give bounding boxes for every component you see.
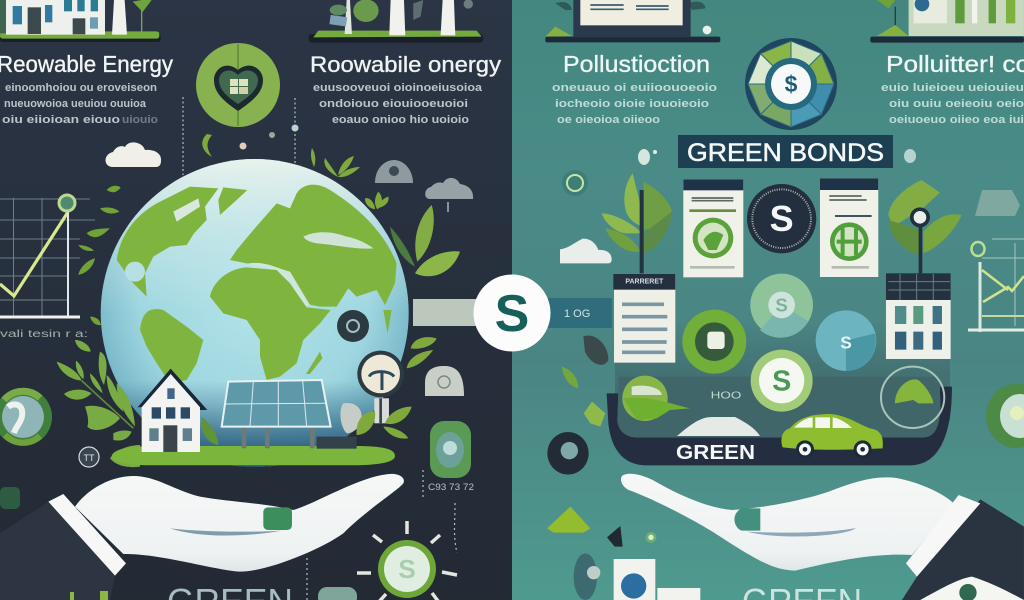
report document (613, 274, 675, 363)
icon: grey clouds, right of globe (375, 160, 473, 212)
dark dollar seal: S (770, 198, 794, 239)
icon: glowing green coin (357, 521, 457, 600)
icon: dollar pie wheel (745, 38, 837, 130)
text block: renewable energy description, left (2, 82, 158, 126)
text block: pollution description (552, 82, 717, 126)
dotted connector lines and small icons above globe (183, 97, 298, 175)
coin: blue: S (840, 332, 852, 352)
illustration: leaves right of globe (365, 192, 460, 368)
white car (677, 417, 760, 436)
left tree (602, 173, 672, 273)
right tree (888, 180, 962, 273)
dark dollar seal (747, 184, 816, 253)
solar panel (222, 380, 331, 448)
accents around banner (562, 149, 916, 196)
icon: small outlined seal, left: TT (84, 453, 95, 463)
text block: renewable energy description, left: uiouio (122, 114, 158, 126)
capsule caption: C93 73 72 (428, 482, 474, 492)
panel: renewable energy background (0, 0, 513, 600)
dark leaf, left (583, 335, 608, 365)
illustration: vehicles and GREEN label in tray (676, 414, 883, 464)
text block: renewable energy description, centre: ondoiouo eiouiooeuoioi (319, 98, 468, 110)
illustration: left hand and sleeve (0, 474, 404, 600)
text block: renewable energy description, left: oiu eiioioan eiouo (2, 114, 120, 126)
connector bar: right of central badge: 1 OG (564, 308, 590, 320)
tray label: GREEN (676, 442, 755, 464)
continents (117, 185, 397, 383)
text block: pollution description, far right: euio luieioeu ueiouieu (881, 82, 1024, 94)
icon: central dollar badge: S (495, 285, 529, 343)
illustration: green bond icon grid (560, 173, 962, 412)
chart label: vali tesin r a: (0, 329, 88, 340)
illustration: leafy bush, lower left of globe (57, 340, 140, 467)
chart: line chart, right edge (968, 190, 1024, 332)
coin: dollar (751, 350, 813, 412)
connector bar: left of central badge (413, 299, 483, 326)
coin: green ring (682, 310, 746, 374)
icon: green ring with question mark, left (0, 388, 52, 446)
faint pavilion icon (975, 190, 1020, 216)
illustration: small leaves, left of globe (78, 186, 121, 325)
illustration: tray holding green bonds (607, 320, 952, 465)
text block: pollution description: iocheoio oioie iouoieoio (555, 98, 709, 110)
text block: pollution description, far right: oeiuoeuo oiieo eoa iui (889, 114, 1024, 126)
text block: renewable energy description, left: nueuowoioa ueuiou ouuioa (4, 98, 147, 110)
cloud (560, 239, 612, 263)
building (886, 273, 951, 359)
icon: green capsule, lower right (428, 421, 474, 492)
illustration: tree and towers on lawn, top centre-left (309, 0, 483, 43)
icon: small pill, bottom left panel (318, 587, 357, 600)
icon: leaves above right of globe (311, 148, 360, 177)
icon: green cabbage orb (622, 376, 742, 421)
coin: teal-green (750, 274, 813, 338)
illustration: building panel, top right (870, 0, 1024, 43)
icon: small outlined seal, left (79, 447, 99, 467)
coin: teal-green: S (775, 295, 788, 316)
heading: pollution, far right: Polluitter! co (886, 51, 1024, 77)
text block: renewable energy description, left: einoomhoiou ou eroveiseon (5, 82, 157, 94)
illustration: right hand and sleeve (621, 474, 1024, 600)
icon: green capsule coin, right edge (986, 384, 1024, 448)
text block: pollution description, far right: oiu ouiu oeieoiu oeio (889, 98, 1024, 110)
icon: white cloud, left (106, 142, 161, 167)
icon: lime bar, bottom edge left (70, 591, 108, 600)
icon: dark round seal, left of tray (547, 432, 589, 475)
bond certificate, right (820, 178, 878, 277)
illustration: lawn with house and solar panel (112, 369, 395, 465)
text block: pollution description, far right (881, 82, 1024, 126)
icon: dark badge on globe (337, 310, 369, 342)
icon: small green box, bottom left (0, 487, 20, 509)
connector bar: right of central badge (546, 298, 612, 328)
heading: pollution reduction, right panel: Pollustioction (563, 51, 710, 77)
bushes beside house (201, 417, 218, 445)
icon: central dollar badge (474, 274, 550, 352)
heading: renewable energy, left: Reowable Energy (0, 51, 173, 77)
heading: renewable energy, centre: Roowabile onergy (310, 52, 501, 77)
text block: pollution description: oe oieoioa oiieoo (557, 114, 660, 126)
icons: lime leaves and pebbles, lower right panel (547, 402, 656, 600)
text block: renewable energy description, centre (313, 82, 483, 126)
panel: green bonds background (512, 0, 1024, 600)
illustration: globe (101, 159, 409, 467)
text block: renewable energy description, centre: euusooveuoi oioinoeiusoioa (313, 82, 483, 94)
banner: GREEN BONDS title: GREEN BONDS (687, 139, 884, 167)
chart: line chart, left edge (0, 195, 95, 340)
dotted accents, bottom left panel (307, 470, 457, 600)
illustration: building and tower on lawn, top left (0, 0, 161, 42)
small label: HOO (711, 391, 742, 402)
text block: pollution description: oneuauo oi euiioouoeoio (552, 82, 717, 94)
icon: glowing green coin: S (398, 554, 416, 584)
bond certificate, left (683, 179, 743, 277)
report document: PARRERET (625, 279, 664, 286)
icon: outlined ring with leaf (881, 367, 944, 428)
coin: dollar: S (772, 366, 791, 398)
documents, bottom of right panel (614, 559, 700, 600)
green car (781, 414, 883, 458)
icon: top right monitor, right panel (545, 0, 720, 42)
icon: green circle with heart (196, 43, 280, 127)
icon: pale shield, right of globe (425, 366, 464, 396)
icon: dollar pie wheel: $ (785, 71, 798, 97)
icon: round sign with leaves, lower right of globe (340, 351, 412, 439)
house (138, 369, 207, 452)
coin: blue (816, 310, 876, 371)
text block: renewable energy description, centre: eoauo onioo hio uoioio (332, 114, 469, 126)
